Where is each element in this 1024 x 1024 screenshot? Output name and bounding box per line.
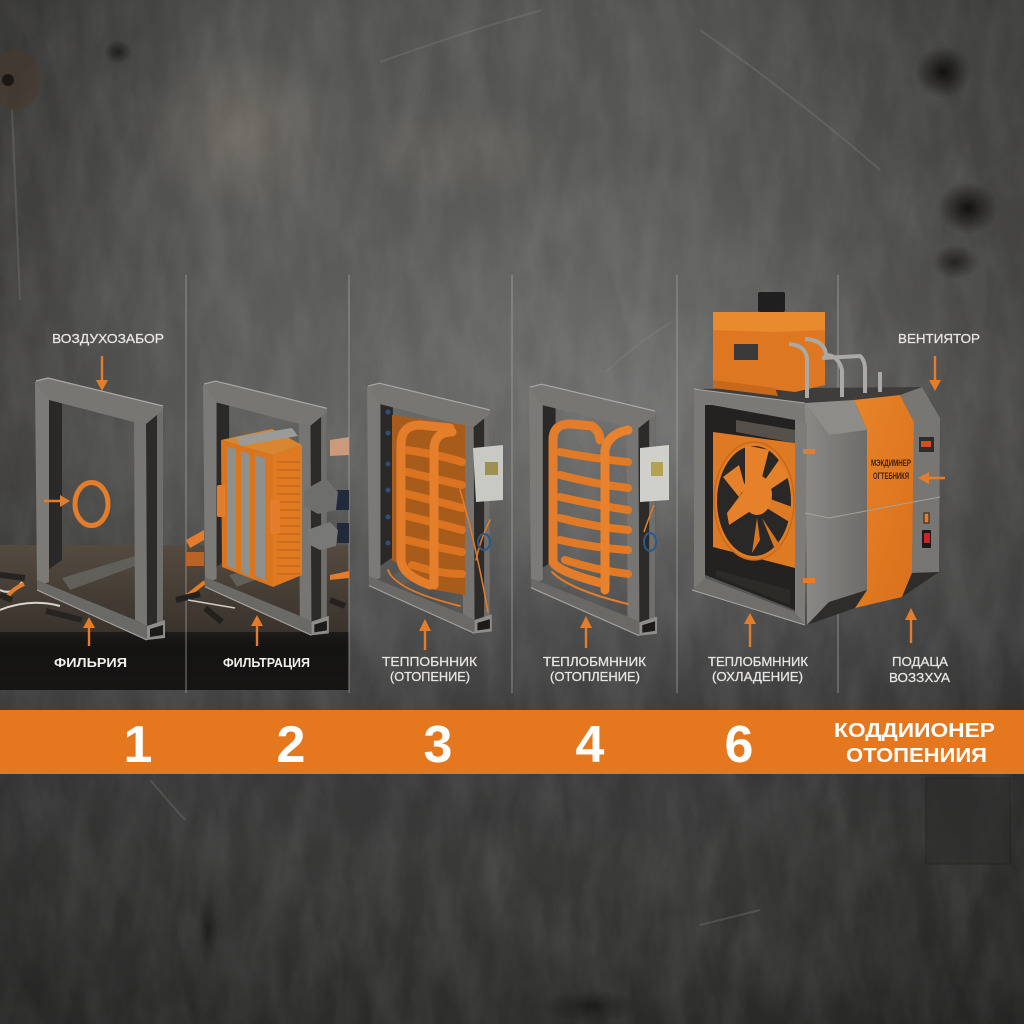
unit: strip text: ОГТЕБНИКЯ [873,471,909,482]
unit: fan [714,442,794,560]
label: air intake: ВОЗДУХОЗАБОР [52,331,164,346]
step number 4: 4 [576,716,605,774]
arrow: filtration up [251,615,263,646]
unit: fan housing [713,432,795,568]
unit: interior opening [705,400,795,610]
label: air supply [889,654,950,685]
step 5: assembled air handling unit [692,292,940,625]
unit: seam [805,497,940,518]
label: heat exchanger heating [382,654,477,684]
step 1: empty steel frame [35,378,165,640]
step 3: steel frame [367,383,492,633]
step number 3: 3 [424,716,452,774]
label: heat exchanger cooling [708,654,808,684]
icon: gloved hands and arm [304,437,349,550]
label: filter: ФИЛЬРИЯ [54,655,127,670]
step 4: steel frame [529,384,657,636]
unit: top slant [805,400,867,435]
step 3: heating coil pipes [388,412,490,612]
arrow: air supply up [905,608,917,643]
band title: ОТОПЕНИИЯ [846,745,987,767]
workbench surface [0,545,349,632]
dark label band under workbench [0,632,349,690]
arrow: heat exchanger 2 up [580,616,592,648]
step 2: steel frame [203,381,329,635]
arrow: left to panel [918,472,945,484]
label: fan: ВЕНТИЯТОР [898,331,980,346]
unit: top surface [694,387,940,435]
step 4: control box and wires [640,445,669,551]
step number 1: 1 [124,716,152,774]
unit: silver pipes [789,339,880,398]
label: heat exchanger heating: (ОТОПЕНИЕ) [390,669,470,684]
dividers [186,275,838,693]
unit: top heat pump box [713,292,825,396]
unit: side panel [805,403,867,625]
unit: orange latches [803,449,815,583]
icon: step 1 tools on workbench [0,575,82,620]
label: heat exchanger heating 2: ТЕПЛОБМННИК [543,654,646,669]
step 2: orange filter cartridge [217,428,302,587]
label: heat exchanger cooling: ТЕПЛОБМННИК [708,654,808,669]
orange step band [0,710,1024,774]
arrow: heat exchanger up [419,619,431,650]
unit: dark lower wedges [807,572,939,625]
band title [834,720,995,767]
label: heat exchanger heating 2: (ОТОПЛЕНИЕ) [550,669,640,684]
unit: orange strip [854,395,914,608]
step 4: coil pipes [552,424,628,604]
label: air supply: ВОЗЗХУА [889,670,950,685]
icon: orange ring [75,482,108,526]
label: air supply: ПОДАЦА [892,654,948,669]
unit: strip text [871,458,911,482]
unit: strip text: МЭКДИМНЕР [871,458,911,469]
step 3: control box [473,445,503,502]
unit: orange button [924,513,929,523]
icon: step 2 background pipes and tools [176,530,349,622]
arrow: cooling up [744,613,756,647]
unit: red switch [922,530,931,548]
arrow: filter up 1 [83,617,95,646]
step number 2: 2 [277,716,305,774]
unit: rear bottom [716,570,790,605]
label: filtration: ФИЛЬТРАЦИЯ [223,655,310,670]
arrow: fan down [929,356,941,391]
band title: КОДДИИОНЕР [834,720,995,742]
label: heat exchanger heating: ТЕППОБННИК [382,654,477,669]
step number 6: 6 [725,716,753,774]
label: heat exchanger heating 2 [543,654,646,684]
unit: display [919,437,934,452]
unit: right panel [900,387,940,573]
label: heat exchanger cooling: (ОХЛАДЕНИЕ) [712,669,803,684]
arrow: air intake down [96,356,108,391]
arrow: right to ring [44,495,70,507]
unit: steel frame front [692,389,807,625]
